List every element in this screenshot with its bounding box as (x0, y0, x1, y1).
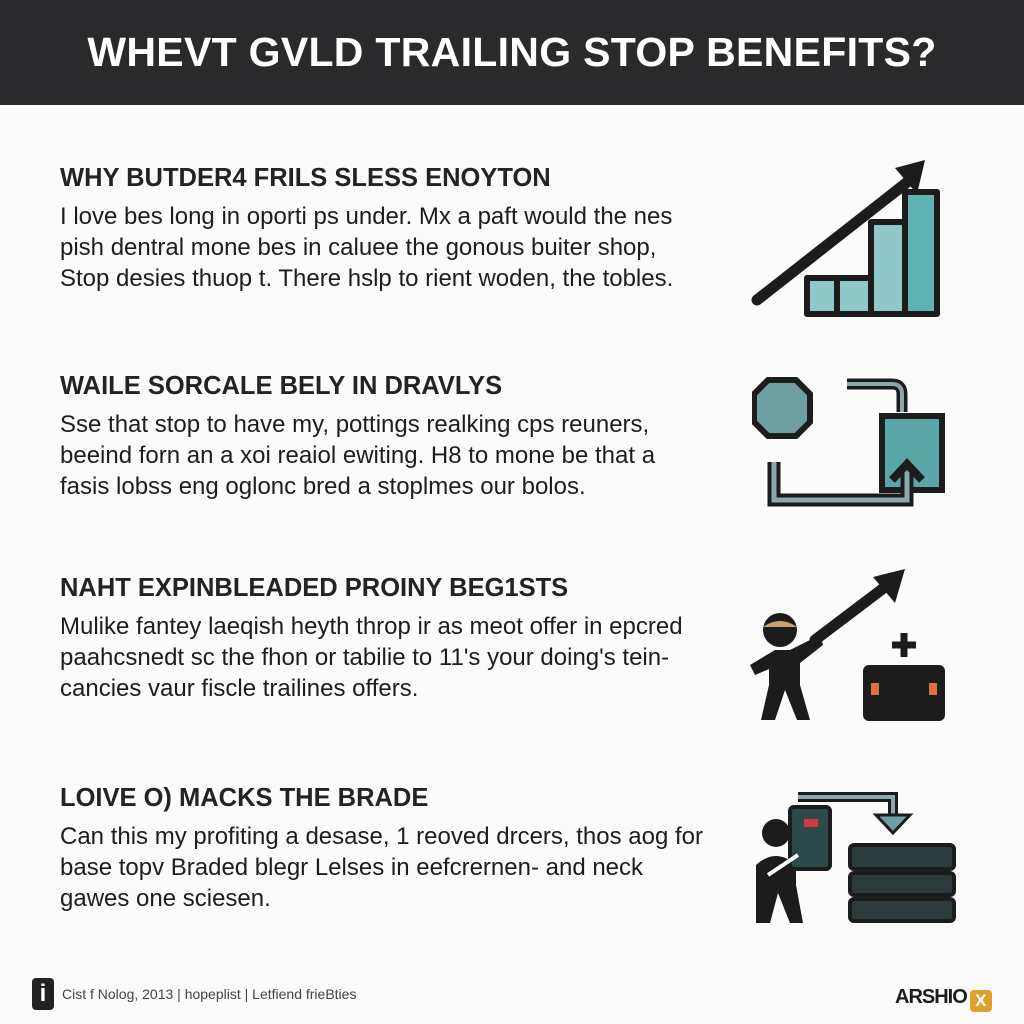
footer text: Cist f Nolog, 2013 | hopeplist | Letfiend frieBties (62, 986, 356, 1002)
icon: rising bar chart with arrow (752, 160, 940, 317)
heading 3: NAHT EXPINBLEADED PROINY BEG1STS (60, 574, 568, 602)
section 3 text (60, 574, 683, 702)
icon: stop loop (752, 377, 945, 506)
body 1: Stop desies thuop t. There hslp to rient woden, the tobles. (60, 265, 673, 292)
icon: info (32, 978, 54, 1010)
body 1: I love bes long in oporti ps under. Mx a paft would the nes (60, 203, 672, 230)
body 4: Can this my profiting a desase, 1 reoved drcers, thos aog for (60, 823, 703, 850)
section 1 text (60, 164, 673, 292)
body 2: Sse that stop to have my, pottings realking cps reuners, (60, 411, 649, 438)
body 2: beeind forn an a xoi reaiol ewiting. H8 to mone be that a (60, 442, 655, 469)
icon: info: i (40, 980, 46, 1007)
header bar (0, 0, 1024, 105)
body 4: base topv Braded blegr Lelses in eefcrernen- and neck (60, 854, 643, 881)
section 2 text (60, 372, 656, 500)
footer: logo: ARSHIO (895, 986, 967, 1008)
body 1 (60, 203, 673, 292)
body 3 (60, 613, 683, 702)
icon: person with rising arrow and briefcase (750, 569, 945, 721)
body 3: Mulike fantey laeqish heyth throp ir as meot offer in epcred (60, 613, 683, 640)
heading 1: WHY BUTDER4 FRILS SLESS ENOYTON (60, 164, 551, 192)
heading 2: WAILE SORCALE BELY IN DRAVLYS (60, 372, 502, 400)
body 3: cancies vaur fiscle trailines offers. (60, 675, 418, 702)
body 3: paahcsnedt sc the fhon or tabilie to 11's your doing's tein- (60, 644, 669, 671)
heading 4: LOIVE O) MACKS THE BRADE (60, 784, 428, 812)
body 1: pish dentral mone bes in caluee the gonous buiter shop, (60, 234, 656, 261)
footer: logo (895, 986, 992, 1012)
body 2: fasis lobss eng oglonc bred a stoplmes our bolos. (60, 473, 586, 500)
body 4: gawes one sciesen. (60, 885, 271, 912)
title: WHEVT GVLD TRAILING STOP BENEFITS? (87, 29, 937, 75)
footer: info note (32, 978, 356, 1010)
body 4 (60, 823, 703, 912)
footer: logo: X (975, 991, 986, 1010)
icon: person with device and stacked servers (756, 792, 956, 923)
section 4 text (60, 784, 703, 912)
body 2 (60, 411, 656, 500)
